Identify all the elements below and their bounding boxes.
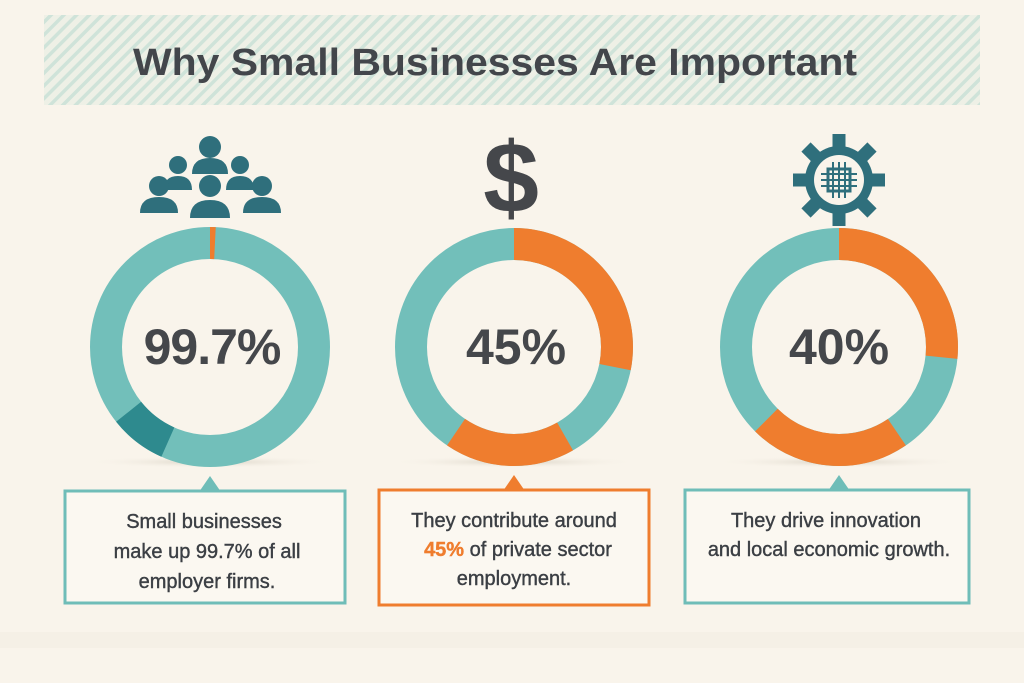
icon: gear with chip xyxy=(793,134,885,226)
icon: dollar: $ xyxy=(483,122,539,234)
box 2 xyxy=(379,475,649,605)
donut 1: 99.7% xyxy=(106,243,314,451)
icon: people group xyxy=(140,136,281,218)
donut 3: 40% xyxy=(736,244,942,450)
box 2: employment. xyxy=(457,568,571,590)
box 2: 45% of private sector xyxy=(424,539,612,561)
box 3: They drive innovation xyxy=(731,510,921,532)
title band xyxy=(44,15,980,105)
shadows xyxy=(85,456,335,468)
box 1 xyxy=(65,476,345,603)
box 2: They contribute around xyxy=(411,510,617,532)
donut 2 label: 45% xyxy=(466,319,566,375)
box 3: and local economic growth. xyxy=(708,539,950,561)
box 1: Small businesses xyxy=(126,511,282,533)
donut 2: 45% xyxy=(411,244,617,450)
box 1: make up 99.7% of all xyxy=(114,541,300,563)
donut 3 label: 40% xyxy=(789,319,889,375)
box 1: employer firms. xyxy=(139,571,275,593)
title: Why Small Businesses Are Important xyxy=(133,42,857,84)
box 3 xyxy=(685,475,969,603)
donut 1 label: 99.7% xyxy=(144,319,281,375)
